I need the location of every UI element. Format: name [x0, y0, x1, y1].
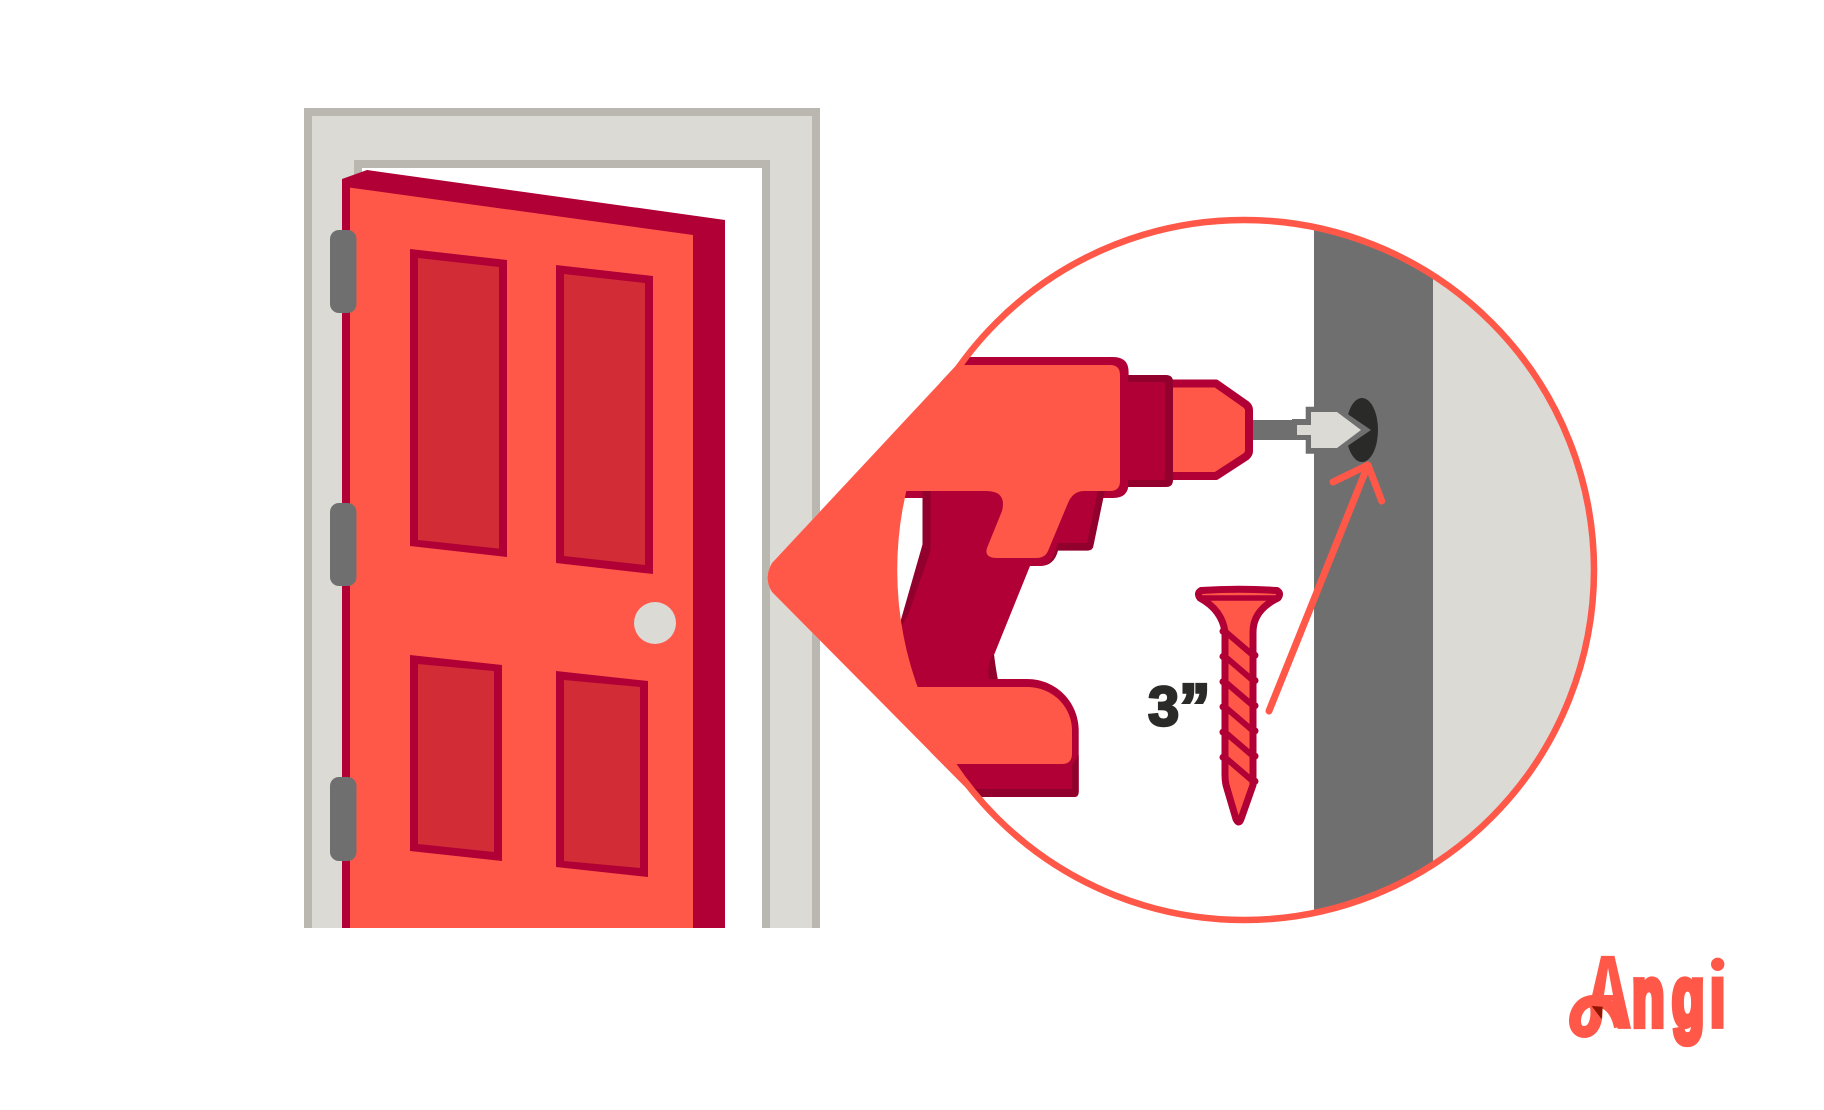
screw length label: 3 — [1148, 674, 1179, 738]
drill chuck — [1160, 384, 1249, 476]
hinge: top — [330, 230, 356, 313]
drill trigger housing — [1040, 491, 1105, 566]
logo fold — [1592, 1006, 1603, 1019]
door panel: top right — [556, 265, 653, 574]
door panel: bottom right — [556, 671, 648, 877]
screw — [1198, 589, 1280, 822]
screw hole — [1346, 398, 1378, 462]
hinge: bottom — [330, 777, 356, 861]
arrow pointing at hole — [1269, 465, 1382, 711]
Angi logo — [1575, 939, 1728, 1046]
infographic — [304, 108, 1724, 1048]
door edge — [342, 170, 725, 928]
drill shadow parts — [893, 357, 1129, 797]
logo loop — [1575, 1001, 1620, 1032]
logo wordmark: A — [1586, 939, 1629, 1046]
drill — [905, 365, 1378, 764]
logo wordmark: n — [1632, 949, 1664, 1044]
callout ring — [894, 220, 1594, 920]
screw length label: ’’ — [1179, 670, 1207, 744]
callout pointer — [768, 331, 995, 817]
drill handle — [900, 491, 931, 626]
magnified callout — [768, 200, 1623, 940]
drill base — [905, 687, 1072, 764]
logo counter and mask — [1578, 945, 1728, 1042]
door frame — [304, 108, 820, 928]
logo wordmark: i — [1710, 949, 1725, 1044]
door face — [350, 188, 693, 928]
drill body outline — [940, 357, 1129, 498]
door — [330, 170, 725, 928]
drill collar — [1128, 375, 1173, 487]
drill body — [906, 365, 1120, 558]
wall section — [1314, 230, 1591, 910]
drill bit — [1253, 398, 1378, 462]
callout background — [768, 221, 1594, 921]
hinge: middle — [330, 503, 356, 586]
logo dot — [1711, 958, 1724, 971]
door knob — [634, 602, 676, 644]
door panel: bottom left — [410, 655, 502, 861]
door panel: top left — [410, 249, 507, 557]
drill base outline — [930, 679, 1079, 797]
logo wordmark: g — [1672, 949, 1704, 1044]
